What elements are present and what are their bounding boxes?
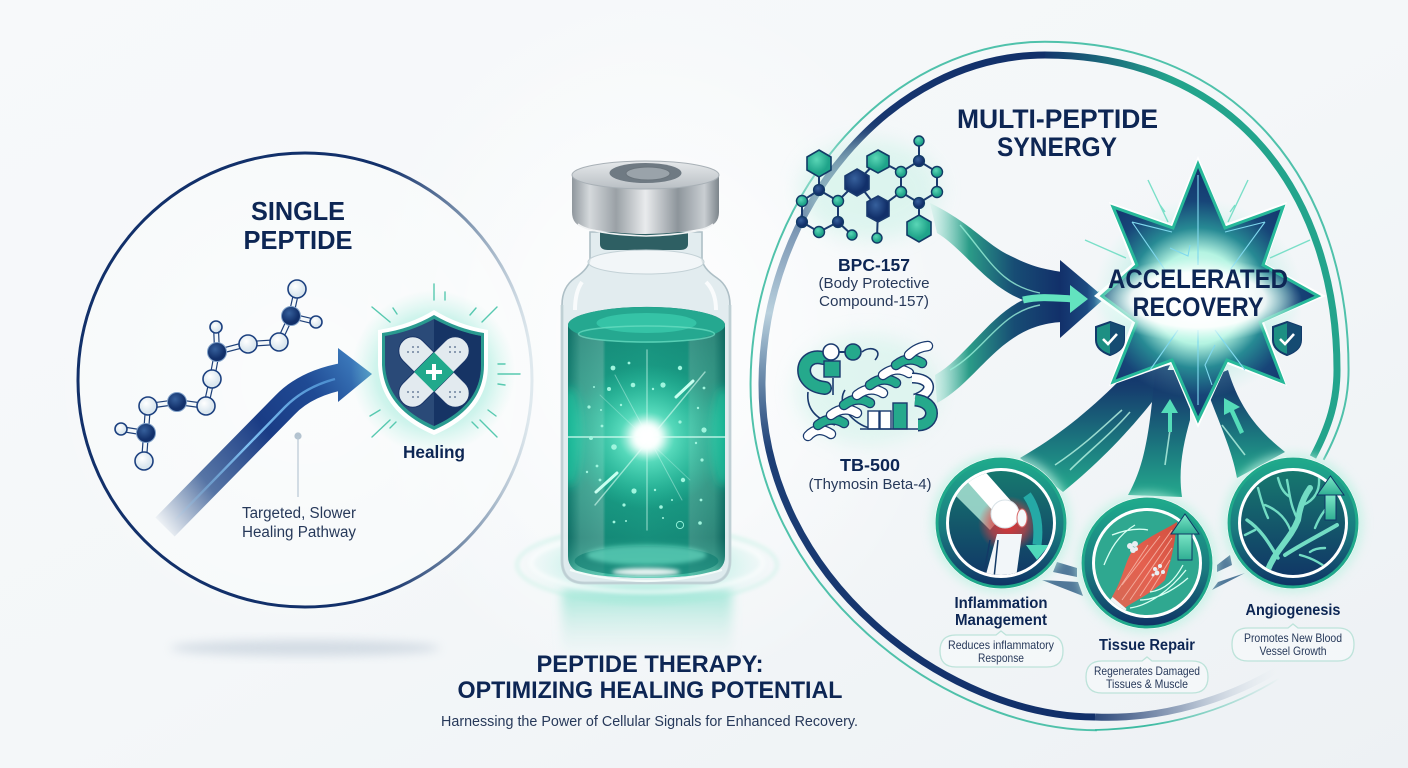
label: inflammation management: Inflammation [954, 595, 1048, 612]
vial glass body [562, 232, 730, 583]
icon: tissue repair muscle [1077, 493, 1217, 633]
vial base glow [517, 521, 777, 660]
vial particles [586, 362, 707, 529]
icon: TB-500 helix [796, 335, 940, 445]
icons: flow arrowheads [1161, 398, 1244, 434]
ring: thick fade bottom right [1095, 665, 1285, 717]
callout: regenerates damaged tissues [1086, 657, 1208, 693]
heading: single peptide: PEPTIDE [244, 225, 352, 255]
panel: single peptide [78, 153, 532, 656]
icon: inflammation knee [931, 453, 1071, 593]
heading: multi-peptide synergy [957, 104, 1158, 162]
vial stopper [600, 232, 688, 250]
arrow up [1317, 476, 1344, 520]
ring: thin teal fade [1095, 678, 1280, 730]
icon: healing shield [351, 284, 520, 454]
ring: thick teal right [1045, 55, 1337, 457]
star label: ACCELERATED [1108, 264, 1288, 294]
small connector bands [1042, 555, 1245, 596]
label: TB-500: (Thymosin Beta-4) [808, 476, 932, 493]
arrow up [1171, 514, 1199, 560]
callout: regenerates damaged tissues: Tissues & Muscle [1106, 677, 1188, 691]
main title line two: OPTIMIZING HEALING POTENTIAL [458, 677, 842, 704]
bars [860, 403, 925, 429]
label: BPC-157: BPC-157 [838, 255, 910, 275]
main title: PEPTIDE THERAPY: [536, 651, 764, 678]
star label: RECOVERY [1132, 292, 1264, 322]
label: angiogenesis: Angiogenesis [1246, 602, 1340, 619]
ring: thick navy left [762, 55, 1095, 717]
label: BPC-157: (Body Protective [818, 275, 930, 292]
vial liquid [568, 306, 725, 578]
vial [517, 161, 777, 660]
circle shadow [170, 640, 440, 656]
callout: pathway pointer [294, 432, 302, 497]
label: BPC-157: Compound-157) [819, 293, 929, 310]
bands: benefits flowing to recovery [1020, 365, 1285, 497]
icon: small shield right [1273, 322, 1301, 355]
heading: multi-peptide synergy: SYNERGY [997, 132, 1117, 162]
callout: reduces inflammatory response: Reduces inflammatory [948, 638, 1054, 652]
callout: reduces inflammatory response [940, 631, 1063, 667]
heading: single peptide: SINGLE [251, 196, 345, 226]
label: inflammation management [954, 595, 1048, 629]
arrows: peptides converge [930, 203, 1105, 403]
ring: thin teal outer [751, 42, 1349, 730]
callout: regenerates damaged tissues: Regenerates Damaged [1094, 664, 1200, 678]
subtitle: Harnessing the Power of Cellular Signals for Enhanced Recovery. [441, 713, 858, 730]
heading: multi-peptide synergy: MULTI-PEPTIDE [957, 104, 1158, 134]
icon: accelerated recovery star [1085, 156, 1326, 428]
label: inflammation management: Management [955, 612, 1047, 629]
label: BPC-157 [818, 255, 930, 310]
callout: promotes new blood vessel growth: Promotes New Blood [1244, 631, 1342, 645]
icon: small shield left [1096, 322, 1124, 355]
heading: single peptide [244, 196, 352, 255]
vial aluminium cap [572, 161, 719, 236]
icon: angiogenesis vessels [1223, 453, 1363, 593]
text: pathway description: Healing Pathway [242, 524, 356, 541]
text: pathway description [242, 505, 356, 541]
callout: promotes new blood vessel growth: Vessel Growth [1260, 644, 1326, 658]
helix ribbons [808, 346, 928, 436]
vial burst of light [567, 350, 727, 530]
callout: reduces inflammatory response: Response [978, 651, 1024, 665]
label: tissue repair: Tissue Repair [1099, 637, 1195, 654]
icon: peptide chain molecule [115, 280, 322, 470]
label: TB-500: TB-500 [840, 455, 900, 475]
text: pathway description: Targeted, Slower [242, 505, 356, 522]
callout: promotes new blood vessel growth [1232, 624, 1354, 661]
bandage [393, 331, 475, 413]
title block [441, 651, 858, 730]
panel: multi-peptide synergy [751, 42, 1363, 730]
circle outline [78, 153, 532, 607]
label: TB-500 [808, 455, 932, 493]
vial glass highlights [562, 282, 730, 583]
arrow: slower healing pathway [165, 348, 372, 527]
vial shoulder highlight [588, 250, 704, 274]
label: healing: Healing [403, 442, 465, 462]
star label [1108, 264, 1288, 322]
icon: BPC-157 molecule [796, 136, 942, 243]
